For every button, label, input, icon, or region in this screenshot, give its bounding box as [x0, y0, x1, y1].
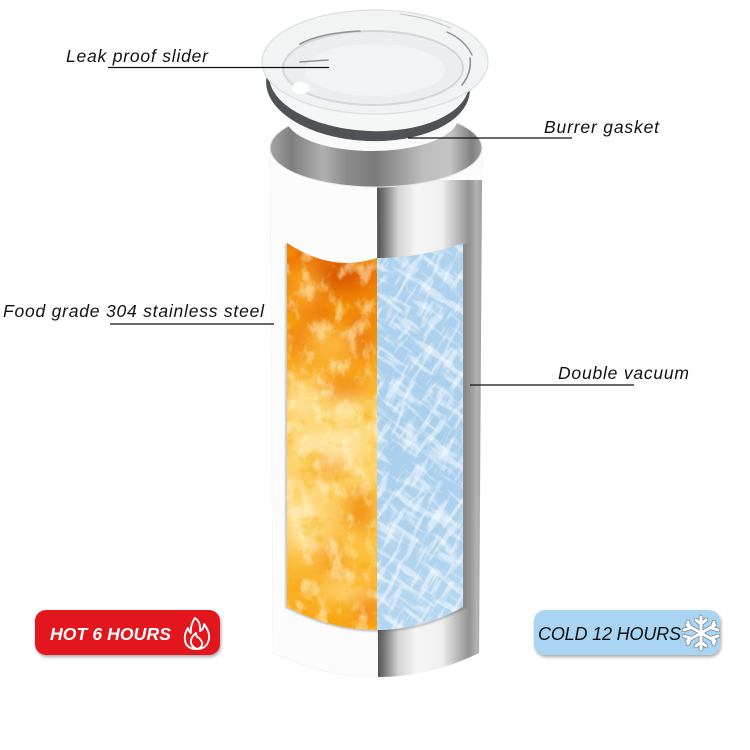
lid highlights [300, 14, 472, 85]
burrer gasket ring [263, 26, 473, 146]
badge: cold 12 hours [534, 610, 720, 655]
lid inner ring [283, 31, 463, 105]
window shadow [285, 243, 467, 632]
lid skirt [266, 24, 472, 136]
label: burrer gasket: Burrer gasket [544, 117, 660, 137]
lid inner highlight [305, 44, 445, 96]
tumbler body [270, 148, 482, 677]
lid rim [262, 10, 488, 114]
icon: snowflake [684, 617, 718, 649]
label: food grade stainless steel: Food grade 304 stainless steel [3, 301, 265, 321]
tumbler [270, 122, 482, 678]
badge: hot 6 hours: HOT 6 HOURS [50, 624, 171, 644]
flame panel [286, 240, 380, 632]
white collar under the gasket [286, 85, 458, 151]
tumbler interior [270, 109, 482, 187]
label: leak proof slider: Leak proof slider [66, 46, 209, 66]
badge: hot 6 hours [35, 610, 220, 655]
stainless steel cutaway [377, 180, 482, 677]
badge: cold 12 hours: COLD 12 HOURS [538, 624, 681, 644]
label: double vacuum: Double vacuum [558, 363, 689, 383]
icon: flame [185, 618, 209, 649]
lid: leak proof slider [262, 10, 488, 151]
ice panel [377, 243, 463, 630]
lid glint [292, 82, 310, 94]
